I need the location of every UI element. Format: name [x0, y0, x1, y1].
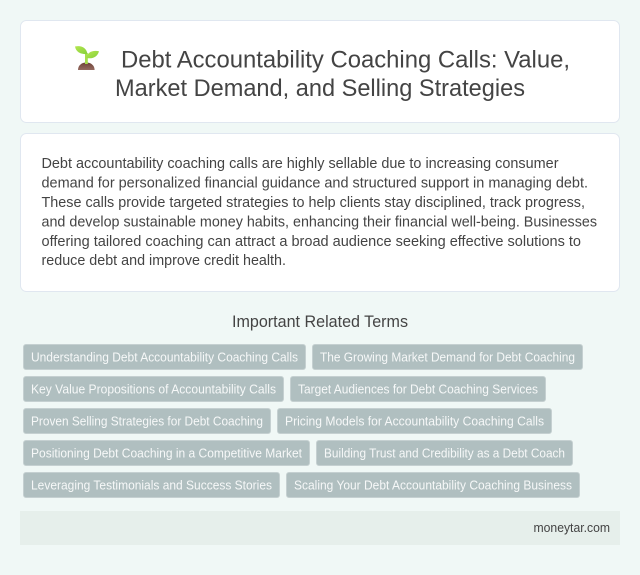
chip: Positioning Debt Coaching in a Competitive Market	[31, 446, 302, 460]
panel: related term chips	[24, 344, 582, 498]
chip	[24, 408, 270, 434]
chip: Leveraging Testimonials and Success Stories	[31, 478, 272, 492]
text block: description	[42, 155, 597, 269]
chip	[316, 440, 572, 466]
footer: moneytar.com	[534, 521, 610, 535]
heading: important related terms: Important Related Terms	[232, 312, 408, 331]
chip	[24, 376, 284, 402]
chip	[312, 344, 582, 370]
title: Market Demand, and Selling Strategies	[115, 75, 525, 102]
text block: description: offering tailored coaching can attract a broad audience seeking effective solutions to	[42, 233, 581, 250]
panel: description card	[20, 134, 620, 292]
chip: Building Trust and Credibility as a Debt Coach	[324, 446, 565, 460]
chip: Proven Selling Strategies for Debt Coaching	[31, 414, 263, 428]
title: Debt Accountability Coaching Calls: Value,	[121, 46, 570, 74]
icon: sprout	[75, 46, 99, 70]
chip: The Growing Market Demand for Debt Coaching	[320, 350, 575, 364]
chip: Pricing Models for Accountability Coaching Calls	[285, 414, 544, 428]
chip: Scaling Your Debt Accountability Coaching Business	[294, 478, 572, 492]
panel: title card	[20, 20, 620, 122]
text block: description: and develop sustainable money habits, enhancing their financial well-being. Businesses	[42, 213, 597, 230]
chip	[290, 376, 546, 402]
chip	[24, 440, 310, 466]
text block: description: demand for personalized financial guidance and structured support in managing debt.	[42, 174, 588, 192]
chip	[24, 472, 280, 498]
chip	[24, 344, 306, 370]
chip: Key Value Propositions of Accountability Calls	[31, 382, 276, 396]
text block: description: These calls provide targeted strategies to help clients stay disciplined, track progress,	[42, 194, 585, 211]
text block: description: reduce debt and improve credit health.	[42, 252, 286, 269]
chip: Target Audiences for Debt Coaching Services	[298, 382, 538, 396]
title	[115, 46, 570, 102]
chip	[278, 408, 552, 434]
footer	[20, 511, 620, 545]
chip	[286, 472, 580, 498]
text block: description: Debt accountability coaching calls are highly sellable due to increasing consumer	[42, 155, 558, 172]
chip: Understanding Debt Accountability Coaching Calls	[31, 350, 298, 364]
